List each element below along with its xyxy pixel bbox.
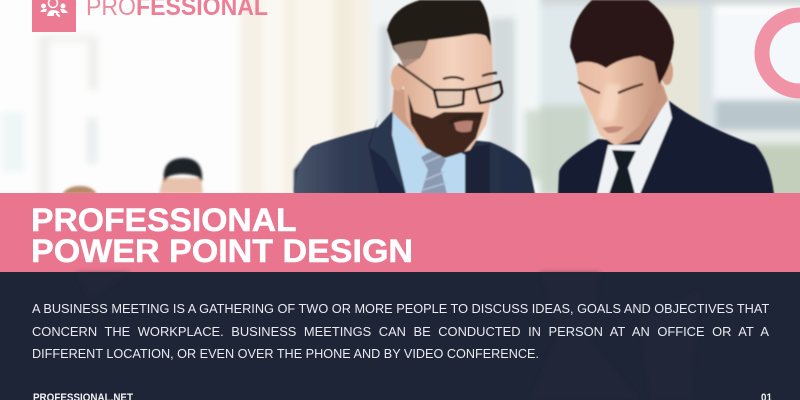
beard (408, 94, 484, 158)
dark text panel (0, 272, 800, 400)
face (575, 46, 662, 146)
ear (391, 65, 405, 91)
suit jacket (558, 100, 774, 194)
ear (661, 59, 673, 85)
icon: people with magnifier (40, 0, 68, 17)
pink title band (0, 193, 800, 272)
hair (387, 0, 491, 60)
shirt (597, 98, 672, 194)
tie (609, 150, 636, 194)
body paragraph: DIFFERENT LOCATION, OR EVEN OVER THE PHONE AND BY VIDEO CONFERENCE. (32, 346, 539, 361)
logo badge (32, 0, 76, 32)
background photo: office (0, 0, 800, 200)
tie (421, 149, 447, 194)
hair (570, 0, 674, 84)
body paragraph: A BUSINESS MEETING IS A GATHERING OF TWO OR MORE PEOPLE TO DISCUSS IDEAS, GOALS AND OBJECTIVES THAT (32, 301, 769, 316)
logo (32, 0, 268, 32)
suit jacket (294, 108, 535, 194)
person: man with glasses (294, 0, 535, 194)
title: PROFESSIONAL (31, 202, 296, 238)
title: POWER POINT DESIGN (31, 233, 413, 269)
neck (392, 85, 470, 150)
body paragraph: CONCERN THE WORKPLACE. BUSINESS MEETINGS CAN BE CONDUCTED IN PERSON AT AN OFFICE OR AT A (32, 324, 769, 339)
glasses (398, 64, 502, 107)
face (402, 30, 493, 157)
shirt (392, 108, 465, 194)
background person: distant man (62, 158, 302, 194)
neck (612, 85, 668, 145)
decorative ring (762, 15, 800, 91)
person: man with dark tie (558, 0, 774, 194)
